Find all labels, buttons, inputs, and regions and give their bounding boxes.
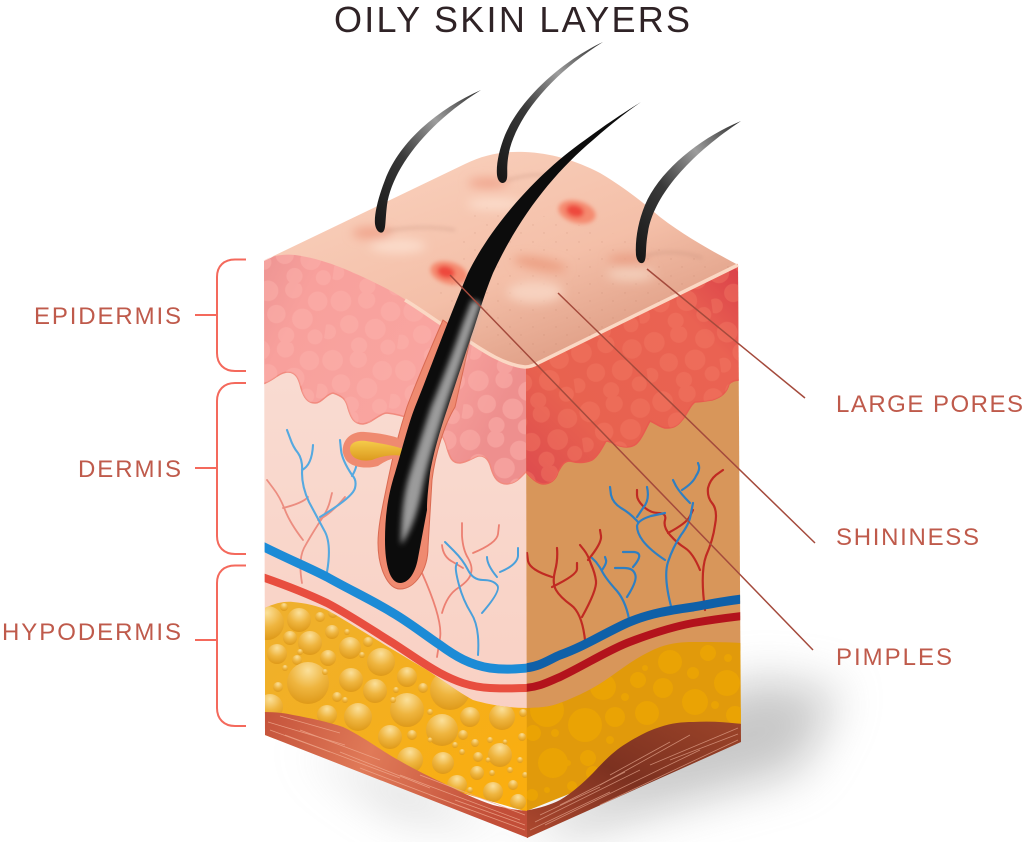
left epidermis xyxy=(264,254,526,485)
right epidermis cells xyxy=(524,262,742,484)
leader line: large pores xyxy=(647,269,805,398)
left muscle fibres xyxy=(268,716,525,830)
title: OILY SKIN LAYERS xyxy=(334,0,690,40)
pink capillaries upper left xyxy=(267,480,345,583)
blue capillaries upper left xyxy=(287,430,356,572)
hair shaft and bulb xyxy=(385,102,641,583)
top skin surface xyxy=(263,152,738,367)
right fat layer xyxy=(524,642,742,812)
right muscle fibres xyxy=(530,728,738,830)
left epidermis cells xyxy=(264,254,526,484)
label: shininess: SHININESS xyxy=(836,524,979,551)
label: hypodermis: HYPODERMIS xyxy=(2,619,181,646)
left face capillaries xyxy=(267,430,518,657)
surface creases xyxy=(385,175,702,258)
gland inner oil xyxy=(350,441,403,461)
surface shape xyxy=(263,152,738,367)
bracket: dermis xyxy=(195,383,246,554)
surface pores xyxy=(440,208,728,352)
right face xyxy=(524,262,744,840)
left muscle layer xyxy=(262,712,528,840)
left face xyxy=(264,254,528,838)
right fat bubbles xyxy=(525,645,744,801)
left dermis base xyxy=(264,257,527,708)
small hair centre xyxy=(497,42,603,183)
right face capillaries xyxy=(527,463,723,640)
left red artery xyxy=(262,577,528,688)
label: epidermis: EPIDERMIS xyxy=(34,303,181,330)
hair gloss xyxy=(401,300,481,545)
left fat layer xyxy=(265,602,528,812)
drop shadow under block xyxy=(300,680,840,835)
hair follicle sheath xyxy=(378,320,470,589)
small hair left xyxy=(375,90,481,233)
blue capillaries lower right xyxy=(445,542,518,655)
pimple upper xyxy=(556,196,598,228)
label: pimples: PIMPLES xyxy=(836,644,952,671)
leader line: pimples xyxy=(450,275,813,650)
right muscle layer xyxy=(524,722,742,840)
pimple lower xyxy=(428,257,470,289)
label: dermis: DERMIS xyxy=(78,456,181,483)
right dermis base xyxy=(524,262,742,720)
right blue vein xyxy=(524,599,742,668)
skin block xyxy=(250,42,744,840)
surface highlights xyxy=(352,178,655,303)
blue capillaries xyxy=(592,463,699,625)
leader line: shininess xyxy=(558,293,815,543)
right red artery xyxy=(524,616,742,688)
bracket: epidermis xyxy=(195,260,246,371)
gland outer xyxy=(343,432,398,468)
right epidermis xyxy=(524,262,742,484)
large central hair xyxy=(385,102,641,583)
label: large pores: LARGE PORES xyxy=(836,391,1023,418)
left blue vein xyxy=(262,546,528,669)
small hair right xyxy=(636,121,741,263)
surface rim xyxy=(405,265,738,367)
pink capillaries lower right xyxy=(422,523,499,657)
red capillaries xyxy=(527,470,723,640)
left fat bubbles xyxy=(250,603,528,810)
sebaceous gland xyxy=(343,432,403,468)
bracket: hypodermis xyxy=(195,566,246,726)
